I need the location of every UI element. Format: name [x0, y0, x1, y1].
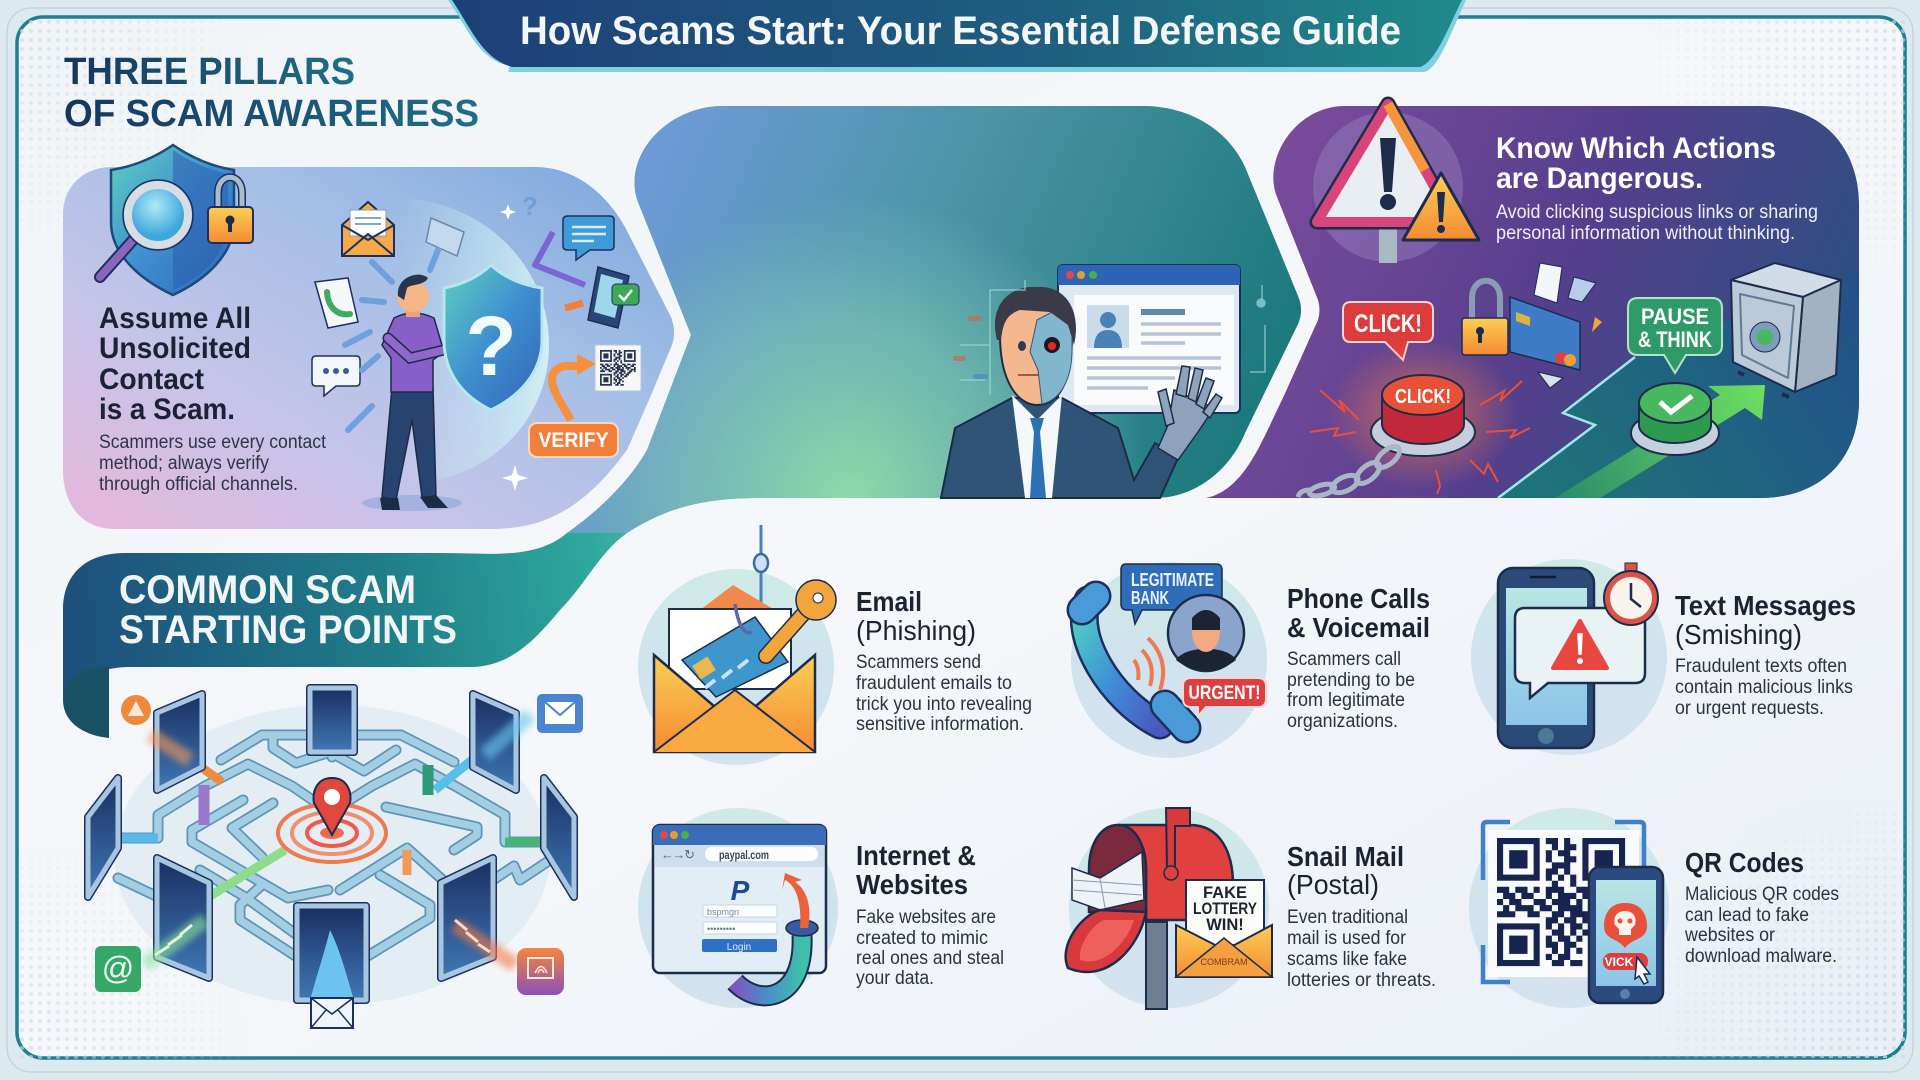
icon: question shield [444, 265, 542, 410]
suit [941, 398, 1178, 498]
ribbon tail [63, 667, 109, 738]
teal wedge [1498, 270, 1859, 498]
icon: smartphone [588, 267, 639, 328]
email text: sensitive information. [856, 714, 1024, 735]
email text: fraudulent emails to [856, 673, 1012, 694]
phone calls text: pretending to be [1287, 670, 1415, 691]
qr codes text: QR Codes [1685, 847, 1804, 878]
text messages text: contain malicious links [1675, 677, 1853, 698]
snail mail text: mail is used for [1287, 928, 1407, 949]
internet text: Fake websites are [856, 907, 996, 928]
icon: qr small [595, 345, 641, 391]
snail mail text: Even traditional [1287, 907, 1408, 928]
panel 3: know which actions are dangerous [1206, 104, 1859, 498]
qr codes text: download malware. [1685, 946, 1837, 967]
item: internet and websites [638, 808, 1004, 1008]
purple arrow [535, 232, 585, 285]
shirt and tie [1012, 395, 1062, 498]
panel 3 heading [1496, 132, 1776, 195]
icon: fake browser [638, 808, 838, 1008]
bottom envelope [311, 998, 353, 1028]
lock and credit card [1462, 281, 1580, 370]
icon: mailbox [1066, 808, 1272, 1009]
phone calls text: organizations. [1287, 711, 1398, 732]
icon: mailbox: COMBRAM [1200, 957, 1248, 967]
icon: qr card [426, 218, 464, 256]
lightning edge [1498, 357, 1635, 498]
phone calls text: from legitimate [1287, 690, 1405, 711]
title banner [448, 0, 1466, 72]
text messages text: or urgent requests. [1675, 698, 1824, 719]
icon: phone with scammer: LEGITIMATE [1131, 570, 1214, 590]
snail mail text [1287, 841, 1436, 991]
panel 1: assume all unsolicited contact [63, 145, 674, 529]
icon: fake browser: paypal.com [719, 848, 769, 862]
coloured route segments [118, 752, 545, 896]
snail mail text: lotteries or threats. [1287, 970, 1436, 991]
icon: question shield: ? [465, 299, 517, 393]
chain [1298, 443, 1403, 498]
pause and think bubble: & THINK [1638, 327, 1712, 352]
email text: (Phishing) [856, 615, 976, 646]
mail tile [537, 694, 583, 733]
email text: Email [856, 586, 922, 617]
glowing beams [145, 715, 530, 965]
at-sign tile: @ [102, 950, 134, 986]
phone calls text [1287, 583, 1430, 732]
verify button: VERIFY [538, 429, 608, 452]
arrows toward person [345, 250, 438, 430]
verify button [529, 423, 618, 457]
red click button [1371, 375, 1475, 456]
panel 3 body [1496, 202, 1818, 244]
click speech bubble [1343, 302, 1433, 360]
circuit marks [953, 280, 1265, 395]
phone calls text: Scammers call [1287, 649, 1401, 670]
internet text: real ones and steal [856, 948, 1004, 969]
panel 1 heading: Assume All [99, 302, 251, 335]
item: phone calls and voicemail [1071, 562, 1430, 758]
panel 1 heading: Contact [99, 363, 204, 396]
qr codes text: Malicious QR codes [1685, 884, 1839, 905]
green button [1631, 383, 1719, 455]
green arrow [1555, 385, 1765, 498]
orange arrow to phone [565, 303, 583, 308]
panel 3 heading: Know Which Actions [1496, 132, 1776, 165]
internet text: Internet & [856, 840, 976, 871]
panel 1 body: Scammers use every contact [99, 432, 327, 453]
email text: Scammers send [856, 652, 981, 673]
warning signs [1313, 104, 1479, 263]
panel 1 heading: is a Scam. [99, 393, 235, 426]
icon: mailbox: WIN! [1206, 916, 1244, 934]
fingerprint tile [517, 948, 564, 995]
head [995, 287, 1076, 405]
icon: fake browser: ←→↻ [661, 847, 695, 862]
icon: phone with scammer [1071, 562, 1267, 758]
heading: common scam starting points: STARTING POINTS [119, 608, 457, 652]
panel 3 body: Avoid clicking suspicious links or sharing [1496, 202, 1818, 223]
text messages text: Text Messages [1675, 590, 1856, 621]
internet text: created to mimic [856, 928, 988, 949]
sparkles [500, 204, 528, 491]
icon: phone with scammer: BANK [1131, 588, 1169, 608]
icon: phone with scammer: URGENT! [1188, 683, 1260, 704]
warning tile [121, 695, 151, 725]
icon: fake browser: Login [727, 942, 751, 953]
email text: trick you into revealing [856, 694, 1032, 715]
inner door glow [310, 930, 354, 1000]
flying documents [1534, 263, 1602, 388]
internet text: your data. [856, 968, 934, 989]
section heading: three pillars: OF SCAM AWARENESS [64, 93, 479, 135]
snail mail text: Snail Mail [1287, 841, 1404, 872]
verify arrow head [577, 354, 596, 375]
doors [88, 688, 574, 1000]
location pin [313, 778, 351, 835]
icon: qr code with phone [1469, 808, 1669, 1008]
maze illustration [88, 688, 583, 1028]
text messages text: (Smishing) [1675, 619, 1802, 650]
panel 2: deepfake impersonator [941, 265, 1265, 498]
panel 3 heading: are Dangerous. [1496, 162, 1703, 195]
section heading: three pillars: THREE PILLARS [64, 51, 355, 93]
glow [1328, 340, 1518, 490]
item: text messages smishing [1471, 559, 1856, 755]
qr codes text [1684, 847, 1839, 967]
safe [1731, 263, 1841, 397]
icon: phishing envelope [638, 525, 836, 765]
qr codes text: can lead to fake [1685, 905, 1809, 926]
icon: fake browser: P [731, 875, 750, 906]
maze paths [118, 735, 550, 957]
person [362, 275, 462, 511]
panel 1 body: through official channels. [99, 474, 298, 495]
icon: shield with magnifier and lock [100, 145, 253, 295]
icon: phone card [315, 278, 358, 328]
question mark: ? [522, 191, 538, 221]
panel 1 heading [99, 302, 251, 426]
item: snail mail postal [1066, 808, 1436, 1009]
item: qr codes [1469, 808, 1839, 1008]
panel 1 body: method; always verify [99, 453, 269, 474]
item: email phishing [638, 525, 1032, 765]
text messages text: Fraudulent texts often [1675, 656, 1847, 677]
browser window [1058, 265, 1240, 413]
snail mail text: (Postal) [1287, 869, 1379, 900]
click speech bubble: CLICK! [1354, 310, 1422, 338]
phone calls text: & Voicemail [1287, 612, 1430, 643]
robotic hand [1158, 366, 1222, 460]
at-sign tile [95, 946, 141, 992]
heading: common scam starting points: COMMON SCAM [119, 568, 416, 612]
icon: qr code with phone: VICK [1605, 955, 1634, 969]
section heading: three pillars [64, 51, 479, 135]
qr codes text: websites or [1684, 925, 1776, 946]
pause and think bubble: PAUSE [1641, 304, 1709, 329]
target rings [278, 804, 386, 862]
verify arrow [552, 366, 580, 420]
broken chains [155, 920, 490, 955]
icon: fake browser: bspmgn [707, 907, 739, 917]
panel 3 body: personal information without thinking. [1496, 223, 1795, 244]
panel 1 heading: Unsolicited [99, 332, 251, 365]
pause and think bubble [1628, 298, 1722, 373]
internet text: Websites [856, 869, 968, 900]
icon: envelope [342, 202, 394, 256]
icon: message bubble [563, 216, 614, 260]
red click button: CLICK! [1395, 386, 1451, 408]
icon: smartphone warning [1471, 559, 1667, 755]
protective sphere [379, 198, 549, 483]
icon: speech bubble [312, 356, 360, 396]
red sparks [1310, 381, 1530, 494]
icon: mailbox: FAKE [1203, 884, 1247, 902]
icon: fake browser: ••••••••• [707, 924, 735, 934]
maze base [114, 705, 550, 1005]
icon: mailbox: LOTTERY [1193, 900, 1257, 918]
panel 1 body [99, 432, 327, 495]
phone calls text: Phone Calls [1287, 583, 1430, 614]
email text [856, 586, 1032, 735]
title text: How Scams Start: Your Essential Defense Guide [520, 9, 1401, 53]
heading: common scam starting points [119, 568, 457, 652]
snail mail text: scams like fake [1287, 949, 1407, 970]
text messages text [1675, 590, 1856, 719]
internet text [856, 840, 1004, 989]
panel 2 and ribbon background [63, 106, 1301, 738]
